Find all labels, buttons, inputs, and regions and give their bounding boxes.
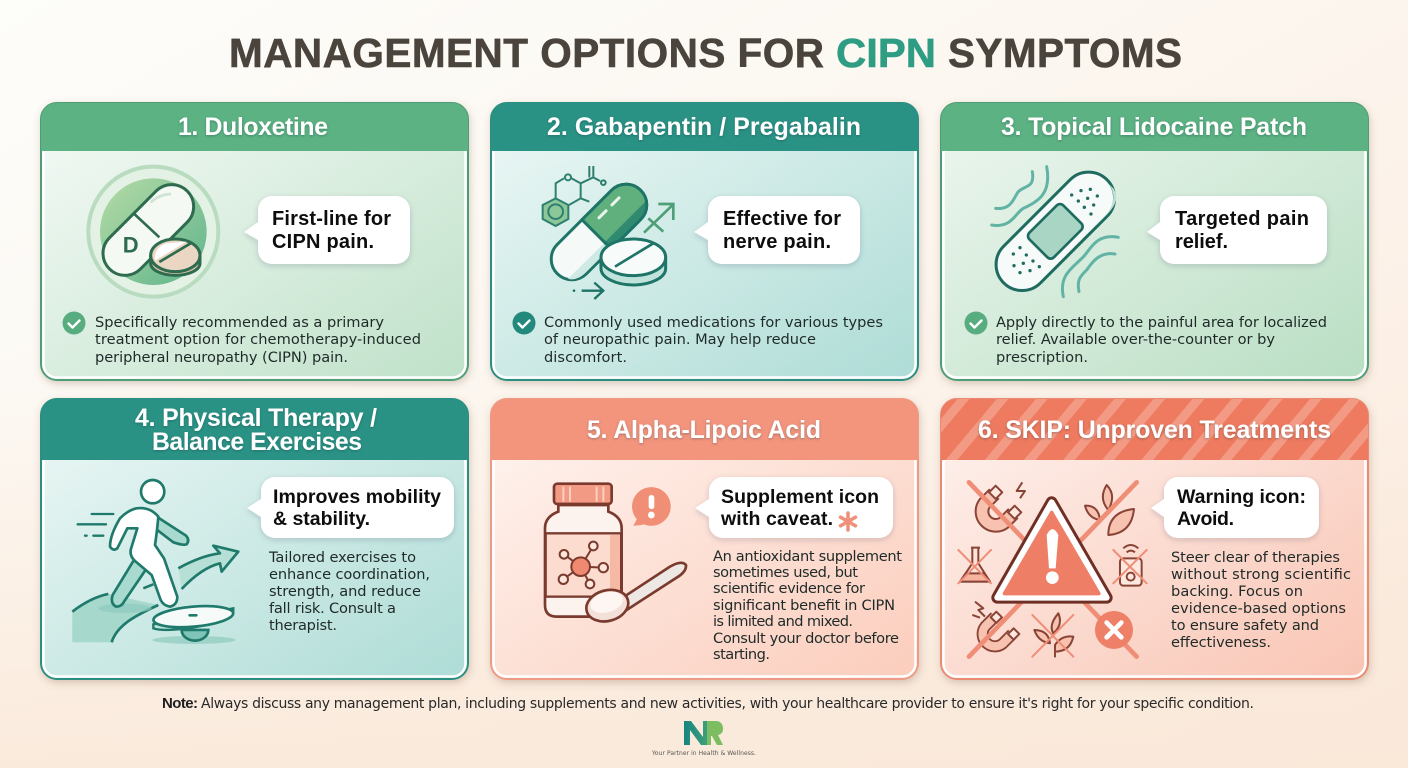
callout: Supplement caveat: with caveat. (720, 508, 833, 530)
callout: Targeted (1147, 196, 1327, 264)
icon: warning triangle with crossed treatments (958, 482, 1147, 657)
text: Lidocaine detail (996, 314, 1327, 366)
text: skip detail: backing. Focus on (1171, 583, 1303, 600)
heading: SKIP: 6. SKIP: Unproven Treatments (978, 417, 1331, 444)
callout: Targeted: relief. (1175, 231, 1228, 253)
heading: Gabapentin: 2. Gabapentin / Pregabalin (547, 114, 861, 141)
text: therapy detail (268, 549, 430, 634)
callout: First-line (244, 196, 410, 264)
icon: molecule, capsule and tablet (543, 166, 673, 299)
icon: asterisk (840, 513, 856, 530)
text: skip detail: to ensure safety and (1171, 617, 1319, 634)
text: supplement detail: starting. (713, 646, 770, 663)
text: therapy detail: enhance coordination, (269, 566, 430, 583)
callout: Targeted: Targeted pain (1175, 208, 1309, 230)
icon: capsule and tablet: D (123, 233, 139, 258)
icon: check (512, 312, 536, 334)
text: Gabapentin detail: discomfort. (544, 349, 627, 366)
note: Always discuss any management plan, including supplements and new activities, with your healthcare provider to ensure it's right for your specific condition. (201, 696, 1254, 712)
text: therapy detail: strength, and reduce (269, 583, 421, 600)
callout: Warning (1151, 477, 1319, 538)
text: supplement detail: sometimes used, but (713, 564, 858, 581)
text: Lidocaine detail: relief. Available over-the-counter or by (996, 331, 1275, 348)
panel: 5. Alpha-Lipoic Acid (491, 399, 918, 679)
callout: Effective (694, 196, 860, 264)
heading: Physical Therapy: 4. Physical Therapy / (135, 405, 377, 432)
text: therapy detail: fall risk. Consult a (269, 600, 396, 617)
callout: Improves mobility: & stability. (273, 508, 370, 530)
callout: Improves mobility: Improves mobility (273, 486, 441, 508)
heading: Alpha-Lipoic Acid: 5. Alpha-Lipoic Acid (587, 417, 821, 444)
text: Duloxetine detail (95, 314, 421, 366)
heading: Physical Therapy: Balance Exercises (152, 429, 362, 456)
text: Gabapentin detail: of neuropathic pain. May help reduce (544, 331, 816, 348)
title: SYMPTOMS (948, 30, 1182, 76)
panel: 3. Topical Lidocaine Patch (941, 103, 1368, 380)
note: Note: (162, 695, 198, 712)
icon: supplement bottle and spoon (545, 484, 686, 626)
callout: Improves mobility (247, 477, 454, 538)
logo (651, 721, 756, 757)
text: Lidocaine detail: prescription. (996, 349, 1088, 366)
title: CIPN (836, 30, 936, 76)
callout: Effective: nerve pain. (723, 231, 831, 253)
panel: 2. Gabapentin / Pregabalin (491, 103, 918, 380)
callout: First-line: CIPN pain. (272, 231, 374, 253)
title (229, 30, 1182, 76)
title: MANAGEMENT OPTIONS FOR (229, 30, 824, 76)
text: supplement detail (713, 548, 902, 663)
callout: Supplement caveat (695, 477, 893, 538)
text: supplement detail: significant benefit in CIPN (713, 597, 895, 614)
icon: person on balance board (72, 480, 238, 644)
heading: Duloxetine: 1. Duloxetine (178, 114, 328, 141)
text: supplement detail: An antioxidant supplement (713, 548, 902, 565)
text: Duloxetine detail: peripheral neuropathy (CIPN) pain. (95, 349, 348, 366)
logo: Your Partner in Health & Wellness. (651, 750, 756, 757)
text: skip detail (1171, 549, 1351, 651)
text: therapy detail: Tailored exercises to (268, 549, 416, 566)
icon: bandage with pain waves (985, 161, 1125, 301)
heading: Lidocaine: 3. Topical Lidocaine Patch (1001, 114, 1307, 141)
panel: 1. Duloxetine (41, 103, 468, 380)
text: skip detail: Steer clear of therapies (1171, 549, 1340, 566)
callout: Supplement caveat: Supplement icon (721, 486, 879, 508)
icon: check (62, 312, 86, 334)
text: supplement detail: scientific evidence for (713, 580, 865, 597)
icon: check (964, 312, 988, 334)
panel: 4. Physical Therapy (41, 399, 468, 679)
text: Gabapentin detail: Commonly used medications for various types (544, 314, 883, 331)
text: Gabapentin detail (544, 314, 883, 366)
callout: Warning: Warning icon: (1177, 486, 1306, 508)
callout: Effective: Effective for (723, 208, 841, 230)
text: supplement detail: Consult your doctor before (713, 630, 899, 647)
text: skip detail: evidence-based options (1171, 600, 1346, 617)
text: therapy detail: therapist. (269, 617, 337, 634)
panel: 6. SKIP Unproven Treatments (941, 399, 1368, 679)
text: skip detail: effectiveness. (1171, 634, 1271, 651)
text: Lidocaine detail: Apply directly to the painful area for localized (996, 314, 1327, 331)
callout: Warning: Avoid. (1177, 508, 1234, 530)
text: skip detail: without strong scientific (1171, 566, 1351, 583)
callout: First-line: First-line for (272, 208, 391, 230)
heading: Physical Therapy (135, 405, 377, 456)
text: Duloxetine detail: Specifically recommended as a primary (95, 314, 384, 331)
icon: capsule and tablet (88, 167, 218, 297)
text: supplement detail: is limited and mixed. (713, 613, 853, 630)
text: Duloxetine detail: treatment option for chemotherapy-induced (95, 331, 421, 348)
